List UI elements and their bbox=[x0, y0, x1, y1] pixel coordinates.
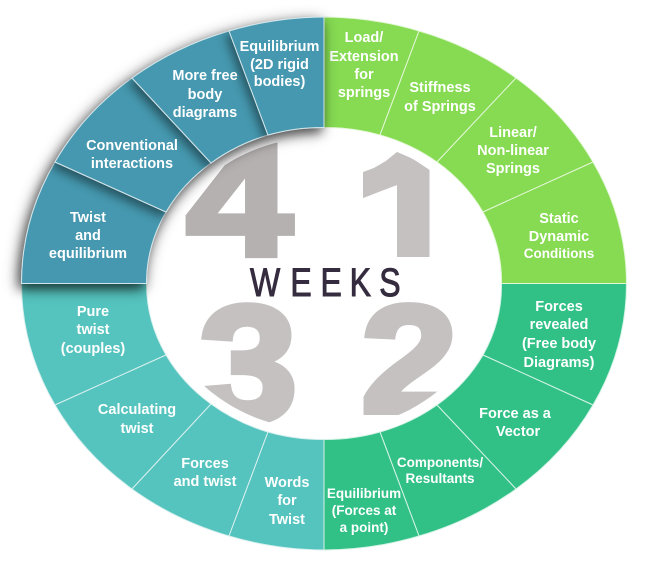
label: twist and equilibrium: Twist bbox=[70, 210, 106, 226]
segment: linear non-linear springs: Linear/ bbox=[489, 125, 537, 141]
quadrant shadow bbox=[18, 21, 321, 288]
segment: static dynamic conditions: Static bbox=[539, 211, 579, 227]
segment: pure twist: (couples) bbox=[61, 341, 125, 357]
segment: linear non-linear springs bbox=[437, 78, 593, 212]
label: equilibrium 2D rigid bodies: (2D rigid bbox=[250, 57, 309, 73]
label: conventional interactions: Conventional bbox=[86, 138, 178, 154]
label: twist and equilibrium: equilibrium bbox=[49, 246, 127, 262]
segment: static dynamic conditions bbox=[483, 162, 626, 284]
segment: forces revealed: revealed bbox=[530, 317, 588, 333]
segment: words for twist bbox=[229, 432, 324, 550]
segment: pure twist: twist bbox=[76, 322, 110, 338]
quadrant: week 2 dark green bbox=[324, 284, 626, 550]
segment: words for twist: Words bbox=[265, 475, 309, 491]
segment: calculating twist: Calculating bbox=[98, 402, 176, 418]
segment: force as a vector bbox=[437, 355, 593, 489]
segment: components and resultants: Components/ bbox=[397, 455, 483, 470]
segment: load extension: Extension bbox=[329, 49, 399, 65]
segment: forces revealed: (Free body bbox=[522, 336, 596, 352]
label: equilibrium 2D rigid bodies: bodies) bbox=[254, 74, 305, 90]
label: conventional interactions bbox=[86, 138, 178, 172]
segment: components and resultants bbox=[380, 405, 516, 536]
segment: forces and twist: and twist bbox=[174, 474, 237, 490]
segment: equilibrium forces at a point: a point) bbox=[340, 520, 388, 535]
label: twist and equilibrium: and bbox=[75, 228, 101, 244]
segment: pure twist: Pure bbox=[77, 304, 109, 320]
segment: linear non-linear springs: Non-linear bbox=[477, 143, 549, 159]
segment: stiffness of springs: Stiffness bbox=[409, 80, 471, 96]
segment: forces revealed: Forces bbox=[535, 299, 583, 315]
label: more free body diagrams bbox=[172, 68, 238, 121]
segment: more free body diagrams bbox=[132, 31, 268, 163]
label: equilibrium 2D rigid bodies: Equilibrium bbox=[240, 39, 319, 55]
number 1: 1 bbox=[336, 42, 475, 391]
label: more free body diagrams: diagrams bbox=[173, 105, 237, 121]
segment: load extension: for bbox=[354, 67, 374, 83]
segment: pure twist bbox=[22, 284, 166, 405]
segment: twist and equilibrium bbox=[22, 162, 166, 284]
label: more free body diagrams: More free bbox=[172, 68, 238, 84]
segment: equilibrium forces at a point bbox=[324, 432, 419, 550]
label: conventional interactions: interactions bbox=[91, 156, 173, 172]
segment: load extension bbox=[324, 17, 419, 135]
number 3: 3 bbox=[199, 273, 297, 456]
segment: force as a vector: Vector bbox=[496, 424, 541, 440]
segment: calculating twist bbox=[55, 355, 211, 489]
labels: week 4 bbox=[49, 39, 319, 262]
segment: load extension: springs bbox=[338, 85, 390, 101]
segment: forces revealed: Diagrams) bbox=[524, 355, 595, 371]
segment: words for twist: Twist bbox=[269, 512, 305, 528]
segment: equilibrium forces at a point: Equilibrium bbox=[327, 486, 401, 501]
quadrant: week 1 light green bbox=[324, 17, 626, 284]
label: more free body diagrams: body bbox=[188, 87, 222, 103]
segment: forces revealed bbox=[483, 284, 626, 405]
label: equilibrium 2D rigid bodies bbox=[240, 39, 319, 90]
segment: stiffness of springs: of Springs bbox=[404, 99, 476, 115]
segment: conventional interactions bbox=[55, 78, 211, 212]
center title WEEKS: WEEKS bbox=[250, 260, 401, 305]
segment: words for twist: for bbox=[277, 493, 297, 509]
segment: forces and twist bbox=[132, 404, 268, 536]
quadrant: week 3 teal bbox=[22, 284, 324, 550]
segment: calculating twist: twist bbox=[120, 421, 154, 437]
number 4: 4 bbox=[186, 112, 292, 289]
segment: components and resultants: Resultants bbox=[405, 471, 475, 486]
label: twist and equilibrium bbox=[49, 210, 127, 262]
segment: static dynamic conditions: Dynamic bbox=[529, 229, 589, 245]
segment: equilibrium forces at a point: (Forces at bbox=[332, 503, 397, 518]
segment: equilibrium 2D rigid bodies bbox=[229, 17, 324, 135]
segment: stiffness of springs bbox=[380, 31, 516, 162]
number 2: 2 bbox=[361, 274, 458, 445]
segment: forces and twist: Forces bbox=[181, 456, 229, 472]
segment: static dynamic conditions: Conditions bbox=[524, 246, 594, 261]
week numbers bbox=[186, 142, 452, 422]
segment: force as a vector: Force as a bbox=[479, 406, 552, 422]
segment: linear non-linear springs: Springs bbox=[486, 161, 540, 177]
segment: load extension: Load/ bbox=[345, 30, 383, 46]
quadrant: week 4 blue segments bbox=[22, 17, 324, 284]
